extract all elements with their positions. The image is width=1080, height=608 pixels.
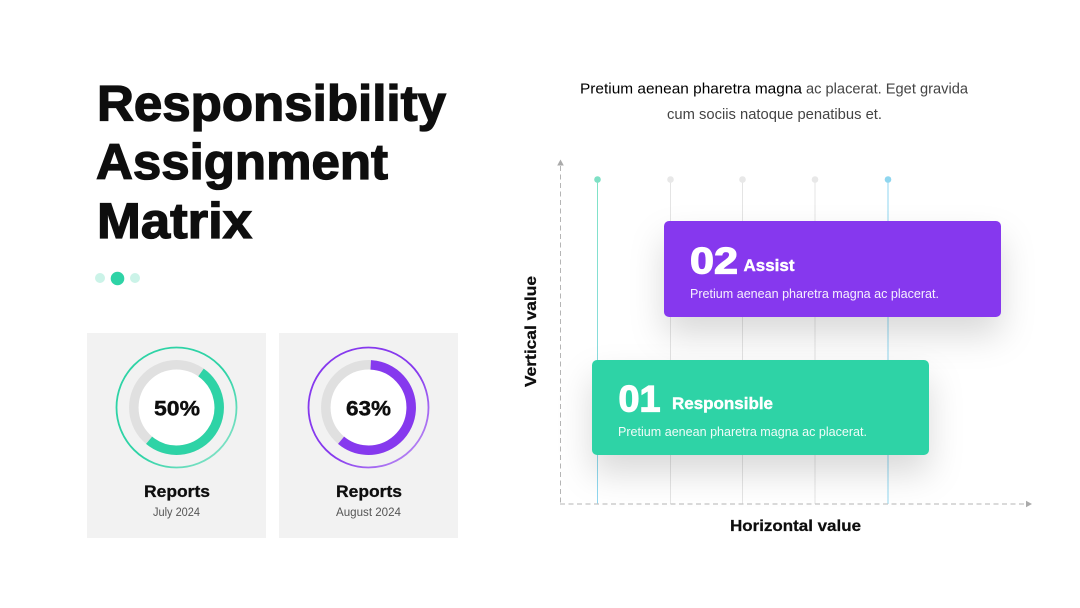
title: Matrix xyxy=(97,193,252,249)
donut chart: 63%: 63% xyxy=(346,398,391,420)
axis label: vertical: Vertical value xyxy=(523,276,540,387)
label: Reports August 2024: Reports xyxy=(336,482,402,501)
axis label: horizontal: Horizontal value xyxy=(730,518,861,535)
card: 02 Assist xyxy=(664,221,1001,317)
intro text: ac placerat. Eget gravida xyxy=(806,80,969,98)
chart: matrix xyxy=(523,160,1032,535)
card: 01 Responsible: Responsible xyxy=(672,395,773,413)
label: Reports August 2024 xyxy=(336,482,402,519)
label: Reports August 2024: August 2024 xyxy=(336,507,402,519)
donut chart: 63% xyxy=(308,348,428,468)
panel: August report xyxy=(279,333,458,538)
card: 02 Assist: Assist xyxy=(744,257,795,275)
label: Reports July 2024: Reports xyxy=(144,482,210,501)
title xyxy=(96,76,446,249)
card: 02 Assist: Pretium aenean pharetra magna ac placerat. xyxy=(690,286,939,301)
intro text: cum sociis natoque penatibus et. xyxy=(667,106,882,123)
grid columns xyxy=(594,176,891,504)
panel: July report xyxy=(87,333,266,538)
intro text: Pretium aenean pharetra magna xyxy=(580,80,803,98)
card: 01 Responsible: 01 xyxy=(618,378,660,420)
card: 02 Assist: 02 xyxy=(690,240,738,282)
card: 01 Responsible: Pretium aenean pharetra magna ac placerat. xyxy=(618,424,867,439)
donut chart: 50% xyxy=(116,348,236,468)
label: Reports July 2024 xyxy=(144,482,210,519)
title: Responsibility xyxy=(97,76,446,132)
title: Assignment xyxy=(96,134,388,190)
card: 01 Responsible xyxy=(592,360,929,455)
axes xyxy=(557,160,1032,507)
donut chart: 50%: 50% xyxy=(154,398,200,420)
intro text xyxy=(580,80,969,123)
pagination dots xyxy=(95,272,140,285)
label: Reports July 2024: July 2024 xyxy=(153,507,201,519)
